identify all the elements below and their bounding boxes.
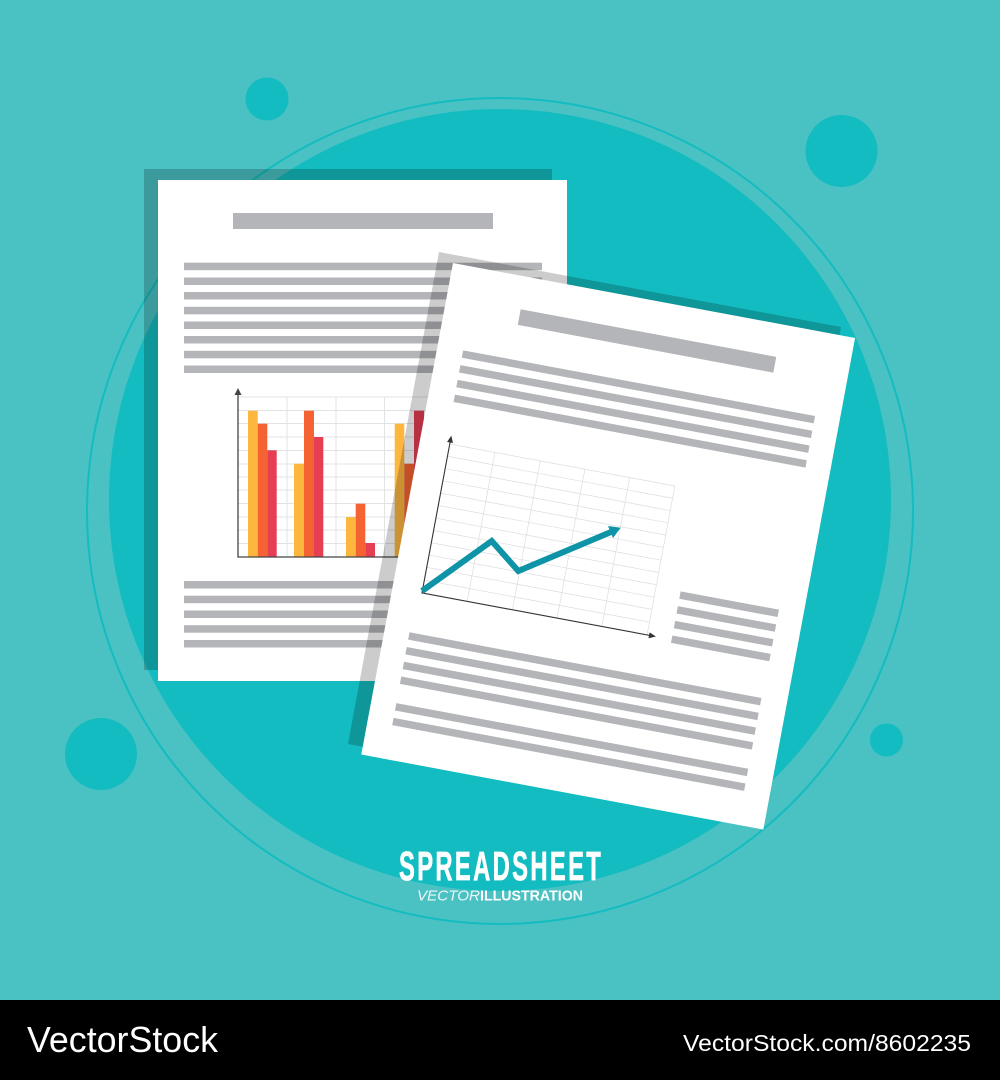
footer image id: VectorStock.com/8602235 [683,1030,971,1056]
back page [158,180,567,681]
subtitle: vector illustration [417,888,583,904]
line chart axes [418,435,685,640]
back page lower text lines [184,581,542,648]
front page upper text lines [454,350,815,468]
subtitle: vector illustration: VECTOR [417,888,480,904]
bar chart axes [234,388,440,557]
bars [248,411,424,557]
subtitle: vector illustration: ILLUSTRATION [480,888,583,904]
front page side text lines [671,591,779,661]
front page title bar [518,309,776,373]
decorative dots [65,78,903,790]
front page shadow [348,252,841,819]
front page [361,263,855,830]
back page sheet [158,180,567,681]
line chart grid [422,444,675,635]
bar chart [234,388,440,557]
back page upper text lines [184,263,542,373]
front page sheet [361,263,855,830]
title: spreadsheet: SPREADSHEET [399,845,601,890]
footer brand: VectorStock [27,1019,219,1060]
footer bar [0,1000,1000,1080]
large teal circle [109,109,891,891]
outer ring [87,98,913,924]
bar chart grid [238,397,433,557]
back page shadow [144,169,552,670]
rising trend arrow [422,526,621,591]
back page title bar [233,213,493,229]
front page lower text lines [392,632,761,791]
